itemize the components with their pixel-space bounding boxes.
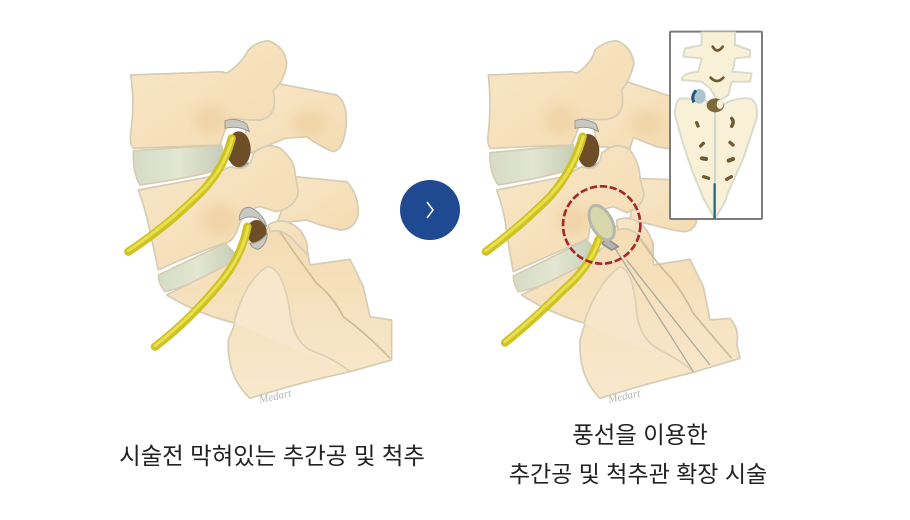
- canal line: [714, 112, 716, 185]
- sacrum: [167, 227, 392, 398]
- inset bones: [675, 32, 757, 219]
- sacrum: [522, 220, 740, 398]
- catheter line: [714, 183, 716, 219]
- lower disc: [158, 243, 238, 292]
- illustration canvas: [124, 30, 763, 403]
- vertebral notches and sacral foramina: [697, 47, 733, 179]
- inset: posterior view of sacrum: [670, 32, 762, 219]
- lower vertebra body: [497, 146, 644, 272]
- caption: after procedure line 1: 풍선을 이용한: [572, 422, 708, 448]
- lower disc: [513, 240, 598, 292]
- red dashed highlight circle: [563, 186, 640, 264]
- left spine illustration: before procedure: [128, 41, 392, 398]
- balloon catheter: [584, 201, 620, 250]
- balloon edge: [693, 90, 696, 102]
- upper vertebra body: [488, 41, 634, 148]
- upper spinous process: [243, 83, 346, 153]
- shading: [543, 105, 663, 235]
- arrow button: [400, 180, 460, 240]
- caption: after procedure line 2: 추간공 및 척추관 확장 시술: [509, 461, 767, 487]
- balloon: [693, 89, 706, 104]
- upper nerve root: [128, 138, 232, 252]
- upper disc: [133, 145, 225, 185]
- watermark right: Medart: [606, 387, 642, 406]
- upper nerve root: [486, 137, 583, 252]
- sacral ridge line: [280, 232, 390, 358]
- upper foramen: [575, 120, 599, 175]
- upper spinous process: [593, 82, 677, 150]
- sacral ridge line: [637, 233, 732, 358]
- lower spinous process: [630, 178, 697, 232]
- upper disc: [490, 145, 577, 185]
- lower vertebra body: [138, 146, 298, 270]
- guide wire: [615, 248, 710, 372]
- caption: before procedure: 시술전 막혀있는 추간공 및 척추: [119, 443, 425, 469]
- canal highlight: [717, 100, 723, 109]
- lower spinous process: [277, 177, 358, 230]
- sacral articular process: [268, 221, 307, 254]
- lower nerve root: [505, 240, 599, 343]
- upper vertebra body: [130, 41, 287, 148]
- spinal canal opening: [707, 98, 724, 112]
- sacral articular process: [617, 218, 653, 254]
- shading: [193, 105, 328, 237]
- sacral inner contour: [584, 267, 693, 372]
- watermark left: Medart: [257, 387, 293, 406]
- lower foramen: [239, 207, 267, 249]
- inset frame: [670, 32, 762, 219]
- sacral inner contour: [234, 267, 350, 372]
- right spine illustration: after procedure: [486, 41, 740, 398]
- lower nerve root: [155, 227, 248, 347]
- upper foramen with nerve opening: [225, 120, 251, 175]
